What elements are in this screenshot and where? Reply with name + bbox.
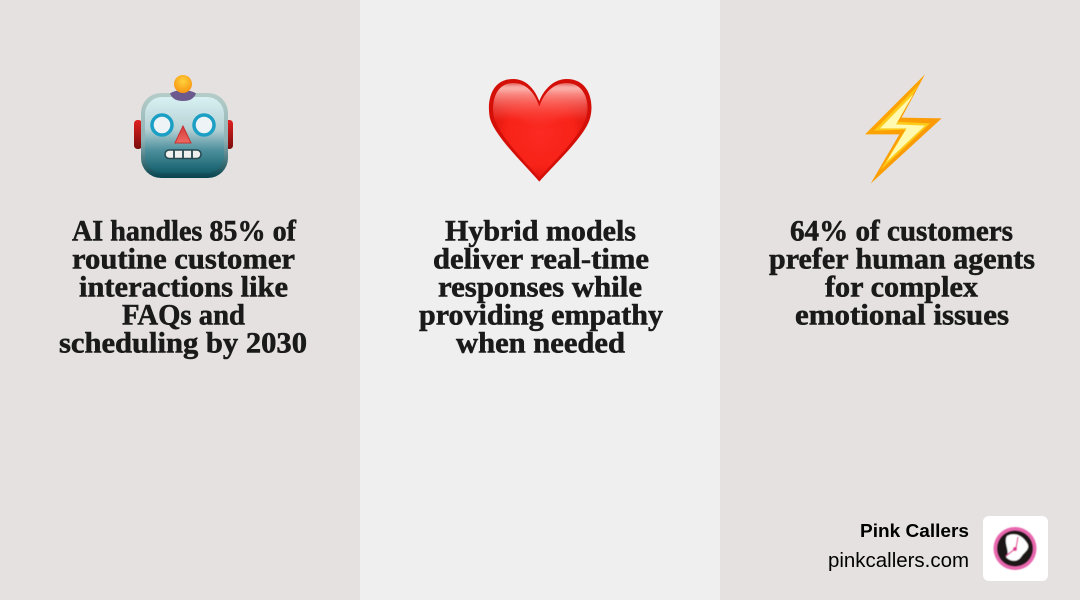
heading: hybrid statistic: responses while <box>438 270 642 304</box>
icon: robot face <box>134 75 233 178</box>
heading: preference statistic: emotional issues <box>795 298 1009 332</box>
heading: preference statistic: prefer human agents <box>769 242 1035 276</box>
brand name: Pink Callers <box>860 521 969 541</box>
heading: hybrid statistic <box>419 214 663 360</box>
heading: hybrid statistic: providing empathy <box>419 298 663 332</box>
heading: AI statistic <box>59 214 307 360</box>
website: pinkcallers.com <box>828 550 969 572</box>
heading: hybrid statistic: deliver real-time <box>433 242 649 276</box>
panel: AI <box>0 0 360 600</box>
heading: preference statistic: for complex <box>825 270 978 304</box>
icon: red heart <box>489 79 591 182</box>
panel: hybrid models <box>360 0 720 600</box>
logo: Pink Callers <box>983 516 1048 581</box>
heading: hybrid statistic: Hybrid models <box>445 214 636 248</box>
heading: AI statistic: FAQs and <box>122 298 245 332</box>
heading: hybrid statistic: when needed <box>456 326 625 360</box>
heading: AI statistic: AI handles 85% of <box>72 214 297 248</box>
heading: AI statistic: routine customer <box>72 242 295 276</box>
heading: AI statistic: interactions like <box>79 270 288 304</box>
heading: AI statistic: scheduling by 2030 <box>59 326 307 360</box>
icon: lightning bolt <box>865 74 942 184</box>
panel: customer preference <box>720 0 1080 600</box>
heading: preference statistic: 64% of customers <box>790 214 1013 248</box>
heading: preference statistic <box>769 214 1035 332</box>
